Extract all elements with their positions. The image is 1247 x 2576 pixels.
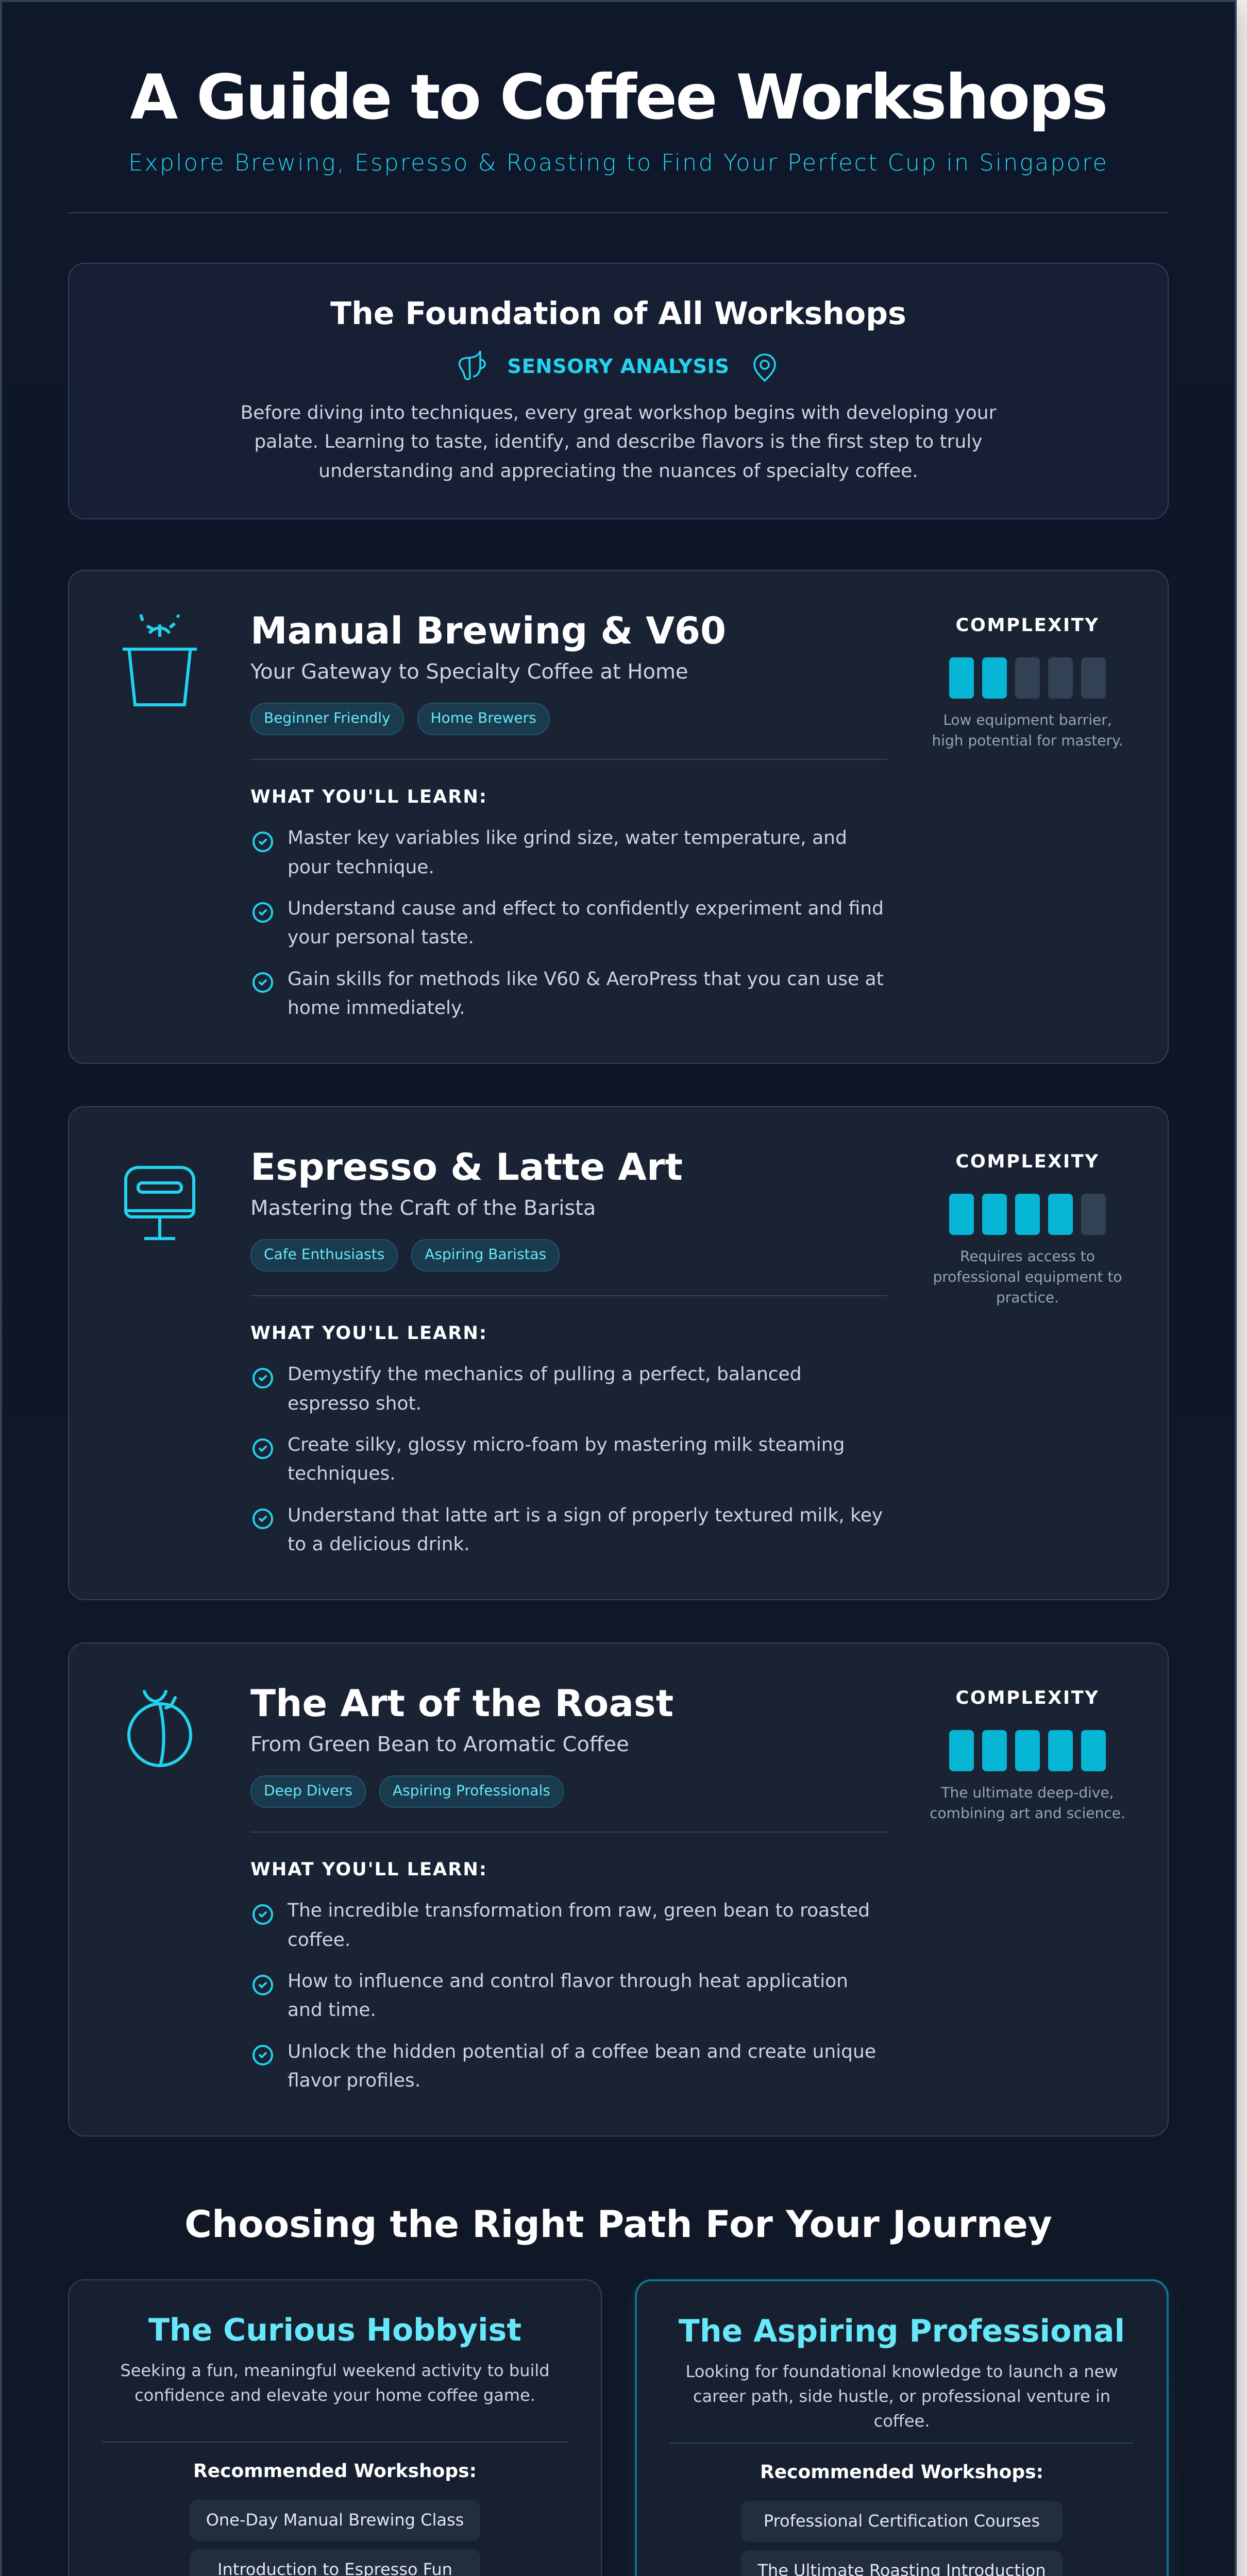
learning point 2: How to influence and control flavor through heat application [288, 1971, 848, 1992]
icon: check 1 [252, 832, 273, 852]
complexity note [924, 1246, 1131, 1308]
learning point 1: The incredible transformation from raw, green bean to roasted [288, 1900, 870, 1921]
audience tags: Cafe Enthusiasts [264, 1246, 384, 1263]
panel: the art of the roast [68, 1642, 1169, 2137]
audience tags [250, 703, 550, 735]
learn heading: WHAT YOU'LL LEARN: [250, 1859, 487, 1880]
icon: check 1 [250, 1902, 275, 1927]
learning point 3: Unlock the hidden potential of a coffee bean and create unique [288, 2041, 876, 2062]
complexity note: Low equipment barrier, [943, 711, 1112, 728]
icon: check 2 [250, 1436, 275, 1461]
learn heading: WHAT YOU'LL LEARN: [250, 786, 487, 807]
recommended heading: Recommended Workshops: [760, 2462, 1043, 2483]
learning point 3: to a delicious drink. [288, 1534, 470, 1555]
persona description [68, 2358, 602, 2408]
learning point 2: your personal taste. [288, 927, 474, 948]
audience tags: Deep Divers [264, 1782, 352, 1799]
learning point 1: pour technique. [288, 857, 434, 878]
foundation description [241, 402, 997, 482]
complexity note [924, 1783, 1131, 1824]
workshop subtitle: Your Gateway to Specialty Coffee at Home [250, 660, 688, 684]
icon: tasting profile [459, 350, 486, 380]
workshop pill 1 [190, 2500, 480, 2541]
workshop pill 2 [741, 2550, 1063, 2576]
icon: check 3 [250, 2043, 275, 2067]
icon: check 3 [252, 972, 273, 993]
subtitle: Explore Brewing, Espresso & Roasting to Find Your Perfect Cup in Singapore [128, 149, 1108, 176]
learning point 1: Demystify the mechanics of pulling a perfect, balanced [288, 1364, 802, 1385]
workshop pill 2 [190, 2549, 480, 2576]
workshop title: Manual Brewing & V60 [250, 609, 726, 652]
recommended heading: Recommended Workshops: [193, 2461, 477, 2482]
audience tags: Home Brewers [431, 709, 536, 726]
sensory analysis label: SENSORY ANALYSIS [507, 355, 730, 378]
complexity meter: 2 of 5 [949, 657, 1106, 699]
foundation heading: The Foundation of All Workshops [330, 296, 906, 332]
learning point 1 [288, 827, 847, 878]
learning point 2 [288, 898, 884, 948]
complexity note: high potential for mastery. [932, 732, 1123, 749]
persona description: confidence and elevate your home coffee game. [134, 2385, 535, 2405]
workshop title: The Art of the Roast [250, 1682, 673, 1725]
learning point 2: and time. [288, 1999, 376, 2021]
complexity heading: COMPLEXITY [955, 1151, 1100, 1172]
complexity heading: COMPLEXITY [955, 615, 1100, 636]
audience tags [250, 1239, 560, 1272]
icon: check 3 [250, 1506, 275, 1531]
complexity meter: 5 of 5 [949, 1730, 1106, 1771]
complexity note: practice. [996, 1289, 1059, 1306]
icon: check 2 [250, 1973, 275, 1997]
icon: coffee bean [119, 1685, 201, 1772]
persona description: Seeking a fun, meaningful weekend activity to build [120, 2361, 550, 2380]
learning point 1 [288, 1896, 870, 1955]
audience tags: Beginner Friendly [264, 709, 391, 726]
icon: check 1 [250, 1366, 275, 1391]
audience tags: Aspiring Professionals [393, 1782, 550, 1799]
workshop pill 1 [741, 2501, 1063, 2542]
learning point 3 [288, 969, 884, 1019]
panel: manual brewing and V60 [68, 570, 1169, 1064]
learning point 3: Understand that latte art is a sign of properly textured milk, key [288, 1505, 883, 1526]
title: A Guide to Coffee Workshops [130, 62, 1106, 133]
learning point 3: flavor profiles. [288, 2070, 420, 2091]
complexity note: The ultimate deep-dive, [941, 1784, 1114, 1801]
workshop pill 1: Professional Certification Courses [764, 2511, 1040, 2531]
audience tags [250, 1775, 564, 1806]
learning point 2: Understand cause and effect to confidently experiment and find [288, 898, 884, 919]
panel: espresso and latte art [68, 1106, 1169, 1600]
complexity note [932, 711, 1123, 749]
panel: the curious hobbyist [68, 2279, 602, 2576]
complexity note: professional equipment to [933, 1268, 1122, 1285]
learning point 3 [288, 2038, 876, 2095]
learning point 1: Master key variables like grind size, water temperature, and [288, 827, 847, 849]
foundation description: Before diving into techniques, every great workshop begins with developing your [241, 402, 996, 423]
icon: check 2 [252, 902, 273, 923]
learning point 1 [288, 1360, 802, 1418]
icon: location pin [753, 353, 776, 382]
workshop subtitle: From Green Bean to Aromatic Coffee [250, 1733, 629, 1756]
complexity note: Requires access to [960, 1248, 1095, 1265]
icon: pour-over dripper [123, 614, 197, 706]
learning point 2: techniques. [288, 1463, 396, 1484]
learn heading: WHAT YOU'LL LEARN: [250, 1323, 487, 1344]
panel: foundation of all workshops [68, 263, 1169, 519]
complexity note: combining art and science. [930, 1805, 1125, 1822]
panel: the aspiring professional [635, 2279, 1169, 2576]
learning point 1: espresso shot. [288, 1393, 422, 1414]
workshop title: Espresso & Latte Art [250, 1145, 683, 1189]
icon: espresso machine [124, 1166, 195, 1240]
section heading: choosing the right path: Choosing the Right Path For Your Journey [184, 2202, 1052, 2246]
foundation description: palate. Learning to taste, identify, and describe flavors is the first step to truly [254, 431, 983, 452]
audience tags: Aspiring Baristas [425, 1246, 546, 1263]
learning point 3 [288, 1501, 883, 1559]
learning point 1: coffee. [288, 1929, 350, 1951]
workshop subtitle: Mastering the Craft of the Barista [250, 1196, 596, 1220]
learning point 2 [288, 1431, 845, 1489]
persona description [635, 2359, 1169, 2433]
complexity meter: 4 of 5 [949, 1194, 1106, 1235]
learning point 2 [288, 1967, 848, 2025]
learning point 3: Gain skills for methods like V60 & AeroPress that you can use at [288, 969, 884, 990]
foundation description: understanding and appreciating the nuances of specialty coffee. [318, 461, 918, 482]
persona description: coffee. [874, 2411, 930, 2431]
complexity heading: COMPLEXITY [955, 1687, 1100, 1708]
persona title: The Aspiring Professional [679, 2313, 1125, 2349]
workshop pill 1: One-Day Manual Brewing Class [206, 2510, 464, 2530]
learning point 3: home immediately. [288, 997, 465, 1019]
learning point 2: Create silky, glossy micro-foam by mastering milk steaming [288, 1434, 845, 1455]
persona description: career path, side hustle, or professional venture in [693, 2386, 1110, 2406]
persona description: Looking for foundational knowledge to launch a new [685, 2362, 1118, 2381]
persona title: The Curious Hobbyist [148, 2312, 521, 2348]
